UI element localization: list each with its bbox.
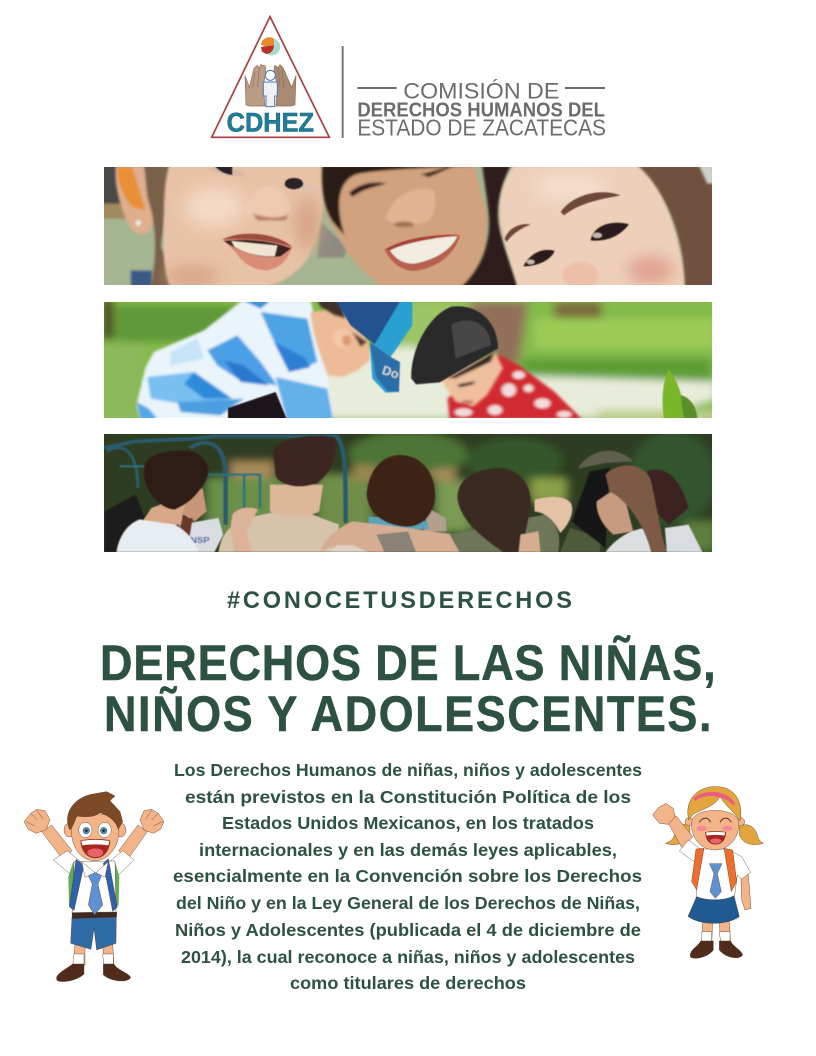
photo strip: three smiling children (101, 164, 714, 289)
girl 1: face (163, 165, 326, 288)
logo emblem triangle: CDHEZ (227, 107, 314, 137)
legs and socks (702, 922, 713, 945)
body paragraph: como titulares de derechos (290, 973, 526, 993)
girl 3: hair (634, 165, 714, 288)
girl 3: brows and eyes (505, 192, 629, 266)
main title: NIÑOS Y ADOLESCENTES. (104, 686, 712, 743)
headband (693, 792, 735, 806)
shirt (73, 861, 116, 913)
girl 1: ear and hair (114, 167, 171, 285)
shorts and belt (71, 917, 116, 950)
boy 2 shirt (448, 355, 582, 419)
plant (663, 369, 697, 419)
legs and socks (73, 943, 85, 965)
main title: DERECHOS DE LAS NIÑAS, (100, 635, 716, 692)
cheeks (697, 826, 707, 831)
trees and reeds (199, 434, 712, 552)
girl 3: face (500, 165, 685, 289)
hashtag heading: #CONOCETUSDERECHOS (227, 587, 572, 614)
body paragraph: esencialmente en la Convención sobre los Derechos (173, 866, 642, 886)
boy 1 cap: Do (380, 363, 401, 382)
teens group: NSP (190, 536, 210, 545)
logo divider and wordmark (342, 46, 606, 141)
photo strip: group of muddy teens embracing (104, 434, 712, 552)
collar (82, 862, 108, 877)
body paragraph: Niños y Adolescentes (publicada el 4 de diciembre de (175, 920, 641, 940)
background (104, 167, 346, 285)
boy 2 face (440, 352, 503, 407)
boy 1 head (311, 300, 370, 377)
girl 3: face shading (534, 175, 674, 284)
girl 1: mouth (222, 233, 292, 270)
blouse (696, 849, 751, 900)
girl 1: face shading (166, 187, 319, 287)
shoes (57, 964, 84, 982)
backpack straps (692, 848, 704, 890)
closed eyes (699, 818, 731, 822)
head (64, 823, 75, 837)
logo: CDHEZ (212, 17, 606, 141)
body paragraph: Los Derechos Humanos de niñas, niños y adolescentes (174, 760, 642, 780)
fists (24, 809, 50, 833)
tie (87, 873, 103, 915)
skirt (688, 896, 739, 923)
logo divider and wordmark: ESTADO DE ZACATECAS (357, 115, 606, 141)
shoes (690, 941, 713, 958)
photo strip: two boys playing outdoors (104, 302, 712, 418)
blurred garden background (104, 302, 712, 418)
pigtails (665, 824, 690, 845)
girl 1: eyes (209, 165, 316, 190)
illustration: cheering girl (653, 787, 763, 958)
tie (709, 864, 722, 898)
body paragraph: internacionales y en las demás leyes aplicables, (199, 840, 617, 860)
hair between girls 2 and 3 (461, 165, 519, 288)
hair (67, 792, 123, 830)
illustration: cheering boy (24, 792, 164, 982)
teens group (105, 436, 702, 552)
eyes (79, 822, 92, 838)
body paragraph (173, 760, 642, 993)
body paragraph: 2014), la cual reconoce a niñas, niños y adolescentes (181, 947, 635, 967)
boy 1 shirt (136, 300, 333, 422)
girl 2: mouth (385, 235, 460, 271)
raised arm and fist (668, 816, 693, 849)
mouth (81, 839, 110, 858)
sleeves (53, 851, 82, 877)
backpack (68, 862, 78, 908)
face (685, 818, 693, 826)
logo divider and wordmark: COMISIÓN DE (403, 78, 559, 103)
body paragraph: están previstos en la Constitución Política de los (185, 787, 631, 807)
playground swing frame (105, 436, 346, 525)
hair (688, 787, 741, 821)
boy 1 cap (336, 300, 412, 393)
logo divider and wordmark: DERECHOS HUMANOS DEL (357, 99, 605, 122)
boy 1 trousers (228, 392, 288, 422)
logo emblem triangle (212, 17, 329, 137)
main title (100, 635, 716, 743)
mouth (705, 831, 726, 844)
body paragraph: Estados Unidos Mexicanos, en los tratados (222, 813, 594, 833)
girl 2: hair and face (322, 165, 487, 288)
body paragraph: del Niño y en la Ley General de los Derechos de Niñas, (176, 893, 640, 913)
boy 2 flat cap (411, 306, 498, 384)
other arm (741, 874, 751, 910)
arms (42, 825, 72, 860)
